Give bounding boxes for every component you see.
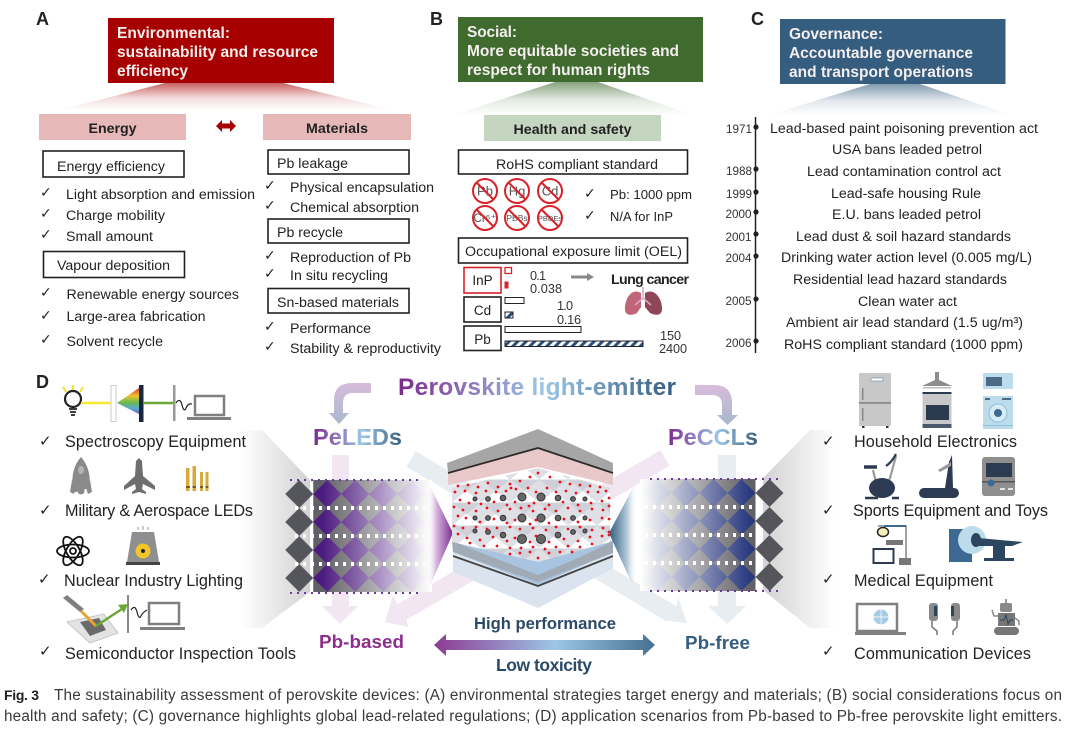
timeline events: Lead-based paint poisoning prevention act bbox=[770, 121, 1038, 137]
list: Pb recycle: In situ recycling bbox=[290, 268, 388, 284]
funnel shade bbox=[769, 84, 1011, 115]
purple wedge to device bbox=[427, 480, 453, 593]
timeline events: Lead contamination control act bbox=[807, 164, 1001, 180]
RoHS compliant standard box: RoHS compliant standard bbox=[496, 157, 658, 173]
double arrow: energy and materials bbox=[216, 120, 236, 132]
list: vapour deposition: Renewable energy sources bbox=[66, 287, 239, 303]
list: energy efficiency: ✓ bbox=[40, 227, 52, 243]
sub-heading: health and safety bbox=[484, 115, 661, 141]
application list: left: Nuclear Industry Lighting bbox=[64, 572, 243, 590]
timeline events: Residential lead hazard standards bbox=[793, 272, 1007, 288]
icon: surgical equipment bbox=[874, 526, 911, 565]
upper dark line bbox=[448, 448, 613, 473]
timeline axis bbox=[753, 117, 759, 353]
curved arrow to PeCCLs bbox=[695, 385, 738, 425]
icon: rocket bbox=[70, 457, 92, 494]
icon: treadmill bbox=[919, 455, 959, 498]
application list: right: Communication Devices bbox=[854, 645, 1031, 663]
perovskite octahedra bbox=[452, 468, 610, 563]
timeline years: 1988 bbox=[726, 165, 752, 178]
blue lower layer bbox=[452, 526, 613, 585]
list: energy efficiency: Small amount bbox=[66, 229, 153, 245]
icons: banned substances: Cr⁶⁺ bbox=[474, 213, 496, 225]
bar chart: OEL values: Cd bbox=[474, 303, 491, 318]
timeline events: Lead dust & soil hazard standards bbox=[796, 229, 1011, 245]
icon: laptop with globe bbox=[855, 604, 906, 635]
crystal lattice: Pb-free bbox=[640, 479, 784, 591]
icons: banned substances: PBDEs bbox=[538, 214, 562, 223]
sub-heading: materials bbox=[263, 114, 411, 140]
timeline events: Ambient air lead standard (1.5 ug/m³) bbox=[786, 315, 1023, 331]
RoHS limits: N/A for InP bbox=[610, 209, 673, 224]
list: Pb recycle: Reproduction of Pb bbox=[290, 250, 411, 266]
icon: oven and hood bbox=[922, 372, 952, 428]
sub-heading: energy: Energy bbox=[88, 121, 137, 137]
label: Pb-free: Pb-free bbox=[685, 632, 750, 653]
timeline events: USA bans leaded petrol bbox=[832, 142, 982, 158]
application list: left bbox=[38, 432, 296, 663]
list: Pb recycle: ✓ bbox=[264, 248, 276, 264]
list: vapour deposition: ✓ bbox=[40, 285, 52, 301]
list: Pb recycle bbox=[264, 219, 411, 284]
arrow to lung cancer bbox=[571, 273, 594, 281]
heading: governance bbox=[780, 19, 1006, 84]
curved arrow to PeLEDs bbox=[329, 383, 371, 424]
heading: environmental: Environmental: bbox=[117, 25, 230, 42]
list: Sn-based materials: Performance bbox=[290, 321, 371, 337]
list: Pb leakage: Physical encapsulation bbox=[290, 180, 434, 196]
list: Sn-based materials: ✓ bbox=[264, 319, 276, 335]
list: Pb leakage: ✓ bbox=[264, 198, 276, 214]
RoHS compliant standard box bbox=[458, 150, 688, 174]
panel D: applications bbox=[36, 372, 1048, 675]
gray top plate bbox=[447, 429, 613, 472]
right gray funnel bbox=[763, 430, 835, 628]
figure caption: Fig. 3 bbox=[4, 687, 39, 703]
bar chart: OEL values bbox=[464, 268, 687, 356]
timeline years: 2000 bbox=[726, 208, 752, 221]
crystal lattice: Pb-based bbox=[285, 480, 432, 593]
timeline years: 2006 bbox=[726, 337, 752, 350]
RoHS limits: Pb: 1000 ppm bbox=[610, 187, 692, 202]
timeline events: Clean water act bbox=[858, 294, 957, 310]
list: vapour deposition: ✓ bbox=[40, 332, 52, 348]
timeline years: 1971 bbox=[726, 123, 752, 136]
label: high performance: High performance bbox=[474, 614, 616, 633]
application list: left: ✓ bbox=[39, 432, 52, 450]
bar chart: OEL values: 1.0 bbox=[557, 299, 573, 313]
list: energy efficiency: Energy efficiency bbox=[57, 159, 166, 175]
bar chart: OEL values: Pb bbox=[474, 332, 491, 347]
icon: exercise bike bbox=[864, 454, 899, 498]
heading: social: More equitable societies and bbox=[467, 43, 679, 60]
icon: microwave and washer bbox=[983, 373, 1013, 429]
heading: governance: Governance: bbox=[789, 26, 883, 43]
icon: airplane bbox=[124, 458, 155, 494]
timeline events: E.U. bans leaded petrol bbox=[832, 207, 981, 223]
title: Perovskite light-emitter: Perovskite light-emitter bbox=[398, 374, 676, 401]
list: energy efficiency: ✓ bbox=[40, 185, 52, 201]
icon: semiconductor inspection bbox=[63, 595, 185, 643]
icon: arcade console bbox=[982, 457, 1015, 496]
bar chart: OEL values: InP bbox=[472, 273, 493, 288]
figure caption bbox=[4, 687, 1062, 725]
list: energy efficiency: Charge mobility bbox=[66, 208, 166, 224]
timeline years: 2001 bbox=[726, 231, 752, 244]
timeline events bbox=[770, 121, 1038, 353]
heading: governance: and transport operations bbox=[789, 64, 973, 81]
label: low toxicity: Low toxicity bbox=[496, 655, 592, 675]
icon: fridge bbox=[859, 373, 891, 428]
panel B: social bbox=[430, 9, 703, 356]
list: Pb recycle: ✓ bbox=[264, 266, 276, 282]
heading: social: Social: bbox=[467, 24, 517, 41]
icons: banned substances: PBBs bbox=[506, 213, 528, 223]
application list: left: Semiconductor Inspection Tools bbox=[65, 645, 296, 663]
list: Sn-based materials: Sn-based materials bbox=[277, 295, 399, 311]
double arrow: Pb-based and Pb-free bbox=[434, 634, 655, 656]
list: energy efficiency: Light absorption and emission bbox=[66, 187, 255, 203]
application list: left: ✓ bbox=[39, 642, 52, 660]
bar chart: OEL values: 0.1 bbox=[530, 269, 546, 283]
sub-heading: health and safety: Health and safety bbox=[514, 122, 632, 138]
panel A: environmental bbox=[36, 9, 442, 357]
funnel shade bbox=[453, 82, 693, 115]
list: vapour deposition: ✓ bbox=[40, 308, 52, 324]
timeline events: Lead-safe housing Rule bbox=[831, 186, 981, 202]
timeline events: Drinking water action level (0.005 mg/L) bbox=[781, 250, 1032, 266]
list: vapour deposition: Solvent recycle bbox=[66, 334, 163, 350]
background arrows bbox=[322, 450, 746, 627]
application list: right: ✓ bbox=[822, 570, 835, 588]
application list: right: ✓ bbox=[822, 432, 835, 450]
timeline years: 2005 bbox=[726, 295, 752, 308]
list: Sn-based materials bbox=[264, 288, 442, 357]
list: Pb recycle: Pb recycle bbox=[277, 225, 343, 241]
sub-heading: materials: Materials bbox=[306, 121, 368, 137]
heading: social bbox=[458, 17, 703, 82]
figure caption: health and safety; (C) governance highlights global lead-related regulations; (D) application scenarios from Pb-based to Pb-free perovskite light emitters. bbox=[4, 708, 1062, 725]
application list: right: ✓ bbox=[822, 501, 835, 519]
icon: robot bbox=[992, 599, 1019, 635]
RoHS limits: ✓ bbox=[584, 186, 596, 202]
RoHS limits bbox=[584, 186, 692, 224]
bar chart: OEL values: 0.16 bbox=[557, 313, 581, 327]
icon: spectroscopy setup bbox=[63, 385, 231, 422]
application list: right: Sports Equipment and Toys bbox=[853, 502, 1048, 520]
bar chart: OEL values: 150 bbox=[660, 329, 681, 343]
list: vapour deposition: Vapour deposition bbox=[57, 258, 170, 274]
icons: banned substances bbox=[473, 179, 562, 230]
list: Sn-based materials: Stability & reproductivity bbox=[290, 341, 442, 357]
icon: CT scanner bbox=[949, 526, 1023, 562]
application list: left: ✓ bbox=[39, 501, 52, 519]
lower dark line bbox=[453, 556, 613, 586]
list: Pb leakage: Pb leakage bbox=[277, 156, 348, 172]
pink upper layer bbox=[448, 447, 613, 485]
heading: environmental: sustainability and resource bbox=[117, 44, 318, 61]
label: PeCCLs: PeCCLs bbox=[668, 424, 758, 450]
list: energy efficiency: ✓ bbox=[40, 206, 52, 222]
panel letter C: C bbox=[751, 9, 764, 29]
heading: governance: Accountable governance bbox=[789, 45, 973, 62]
central device stack bbox=[447, 429, 613, 608]
occupational exposure limit box bbox=[458, 238, 688, 263]
icon: earphones bbox=[929, 603, 960, 635]
heading: environmental: efficiency bbox=[117, 63, 188, 80]
icon: atom bbox=[57, 534, 89, 568]
lead atoms bbox=[473, 493, 587, 544]
list: energy efficiency bbox=[40, 151, 255, 245]
label: PeLEDs: PeLEDs bbox=[313, 424, 402, 450]
timeline years: 1999 bbox=[726, 188, 752, 201]
icon: bullets bbox=[186, 466, 208, 491]
application list: left: Spectroscopy Equipment bbox=[65, 433, 246, 451]
timeline years bbox=[726, 123, 752, 350]
figure caption: The sustainability assessment of perovskite devices: (A) environmental strategies target energy and materials; (B) social considerations focus on bbox=[54, 687, 1062, 704]
application list: right: Medical Equipment bbox=[854, 572, 994, 590]
icon: nuclear reactor bbox=[126, 526, 160, 565]
application list: left: Military & Aerospace LEDs bbox=[65, 502, 253, 520]
icons: banned substances: Hg bbox=[509, 184, 525, 198]
list: vapour deposition: Large-area fabrication bbox=[66, 309, 206, 325]
icon: lungs bbox=[625, 287, 662, 315]
label: lung cancer: Lung cancer bbox=[611, 272, 689, 288]
bar chart: OEL values: 0.038 bbox=[530, 282, 562, 296]
list: Pb leakage: Chemical absorption bbox=[290, 200, 419, 216]
timeline events: RoHS compliant standard (1000 ppm) bbox=[784, 337, 1023, 353]
panel letter D: D bbox=[36, 372, 49, 392]
application list: left: ✓ bbox=[38, 570, 51, 588]
funnel shade bbox=[60, 83, 392, 110]
left gray funnel bbox=[240, 430, 310, 628]
heading: environmental bbox=[108, 18, 334, 83]
halide atoms bbox=[454, 473, 609, 558]
label: Pb-based: Pb-based bbox=[319, 631, 404, 652]
icons: banned substances: Cd bbox=[542, 184, 558, 198]
sub-heading: energy bbox=[39, 114, 186, 140]
icons: banned substances: Pb bbox=[477, 184, 493, 198]
list: vapour deposition bbox=[40, 252, 239, 350]
bar chart: OEL values: 2400 bbox=[659, 342, 687, 356]
bottom pale layer bbox=[453, 552, 613, 608]
application list: right: ✓ bbox=[822, 642, 835, 660]
application list: right bbox=[822, 432, 1048, 663]
occupational exposure limit box: Occupational exposure limit (OEL) bbox=[465, 244, 682, 260]
list: Pb leakage bbox=[264, 150, 434, 216]
application list: right: Household Electronics bbox=[854, 433, 1017, 451]
list: Pb leakage: ✓ bbox=[264, 178, 276, 194]
panel C: governance bbox=[726, 9, 1038, 353]
blue wedge from device bbox=[609, 480, 637, 595]
list: Sn-based materials: ✓ bbox=[264, 339, 276, 355]
panel letter B: B bbox=[430, 9, 443, 29]
timeline years: 2004 bbox=[726, 252, 752, 265]
heading: social: respect for human rights bbox=[467, 62, 650, 79]
lower gray layer bbox=[452, 541, 613, 582]
RoHS limits: ✓ bbox=[584, 208, 596, 224]
panel letter A: A bbox=[36, 9, 49, 29]
